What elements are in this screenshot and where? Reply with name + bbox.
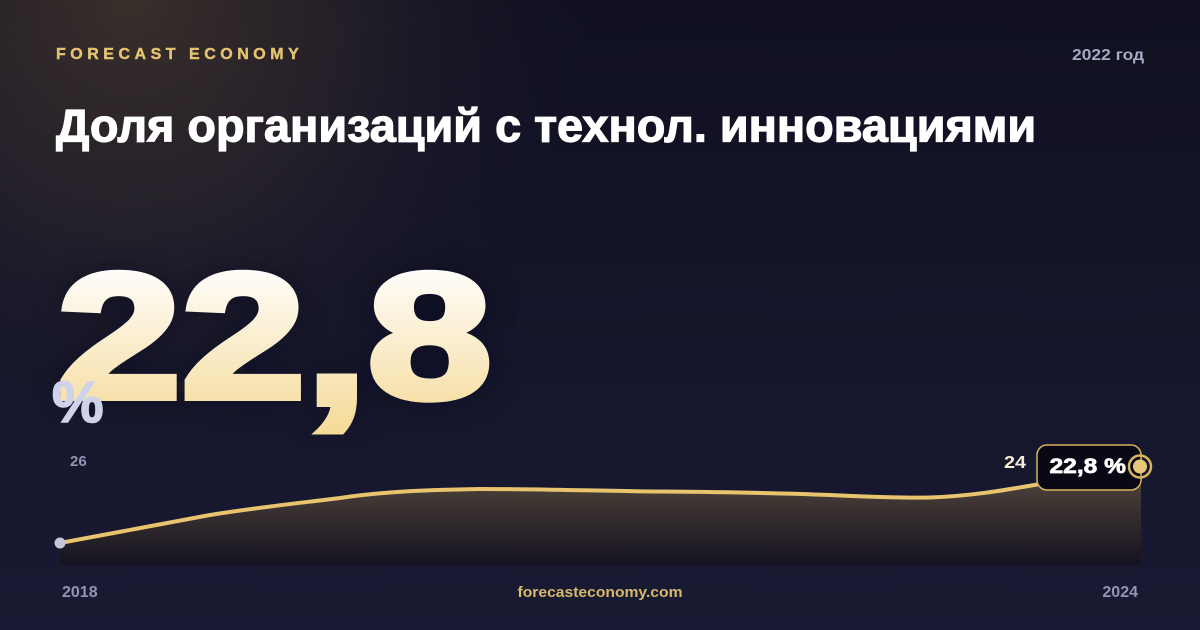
chart line <box>60 484 1040 543</box>
start year label: 2018 <box>62 584 98 601</box>
axis min label: 19 <box>70 539 87 556</box>
percent sign: % <box>52 370 104 435</box>
chart area fill <box>60 484 1141 565</box>
year label: 2022 год <box>1072 46 1145 64</box>
end value label: 24 <box>1004 453 1027 473</box>
big number: 8 <box>368 236 492 435</box>
title: Доля организаций с технол. инновациями <box>56 100 1036 152</box>
start point <box>54 538 66 548</box>
line chart <box>54 484 1141 565</box>
brand label: FORECAST ECONOMY <box>56 46 303 63</box>
big number: 22 <box>57 236 305 435</box>
big number: , <box>305 242 368 441</box>
axis max label: 26 <box>70 453 87 470</box>
source url: forecasteconomy.com <box>518 584 682 601</box>
end marker <box>1129 456 1151 478</box>
end year label: 2024 <box>1102 584 1138 601</box>
value callout: 22,8 % <box>1050 454 1126 478</box>
big number: 22,8 <box>57 236 492 435</box>
value callout <box>1037 445 1141 490</box>
